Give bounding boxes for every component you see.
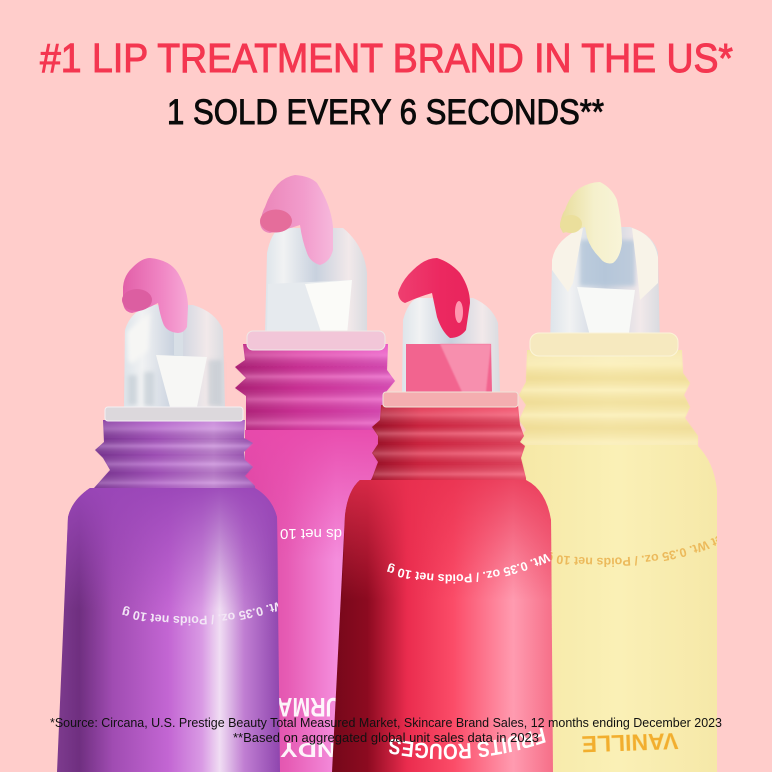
purple balm [123, 258, 188, 333]
red clear applicator [402, 298, 500, 393]
pink balm nub [260, 210, 292, 232]
red shade name: FRUITS ROUGES [389, 728, 546, 760]
yellow tube neck [519, 350, 698, 450]
pink clear applicator [265, 228, 367, 334]
red tube neck [365, 405, 526, 490]
purple applicator white reflection [127, 312, 150, 364]
yellow neck ridges [519, 350, 698, 450]
yellow applicator wedge [577, 287, 635, 347]
pink tube neck [235, 344, 395, 432]
yellow applicator left petal [552, 228, 583, 292]
tube: red [332, 246, 599, 772]
tube: hot pink (back) [235, 175, 395, 772]
red balm highlight [455, 301, 463, 323]
purple applicator stem [174, 330, 183, 356]
yellow cap ring [530, 333, 678, 356]
pink tube label [277, 525, 342, 760]
red tube body [332, 480, 553, 772]
red body top shade [342, 480, 552, 600]
red applicator balm fill [406, 344, 492, 392]
yellow applicator right petal [632, 228, 658, 300]
footnote 1: *Source: Circana, U.S. Prestige Beauty Total Measured Market, Skincare Brand Sales, 12 months ending December 2023 [50, 715, 722, 730]
pink cap ring [247, 331, 385, 350]
pink shade name line 2: NDY [279, 738, 336, 760]
red applicator highlight [440, 344, 491, 392]
pink shade name line 1: URMA [277, 692, 341, 722]
red cap ring [383, 392, 518, 407]
pink applicator wedge [305, 280, 352, 335]
yellow shade name: VANILLE [581, 728, 679, 757]
purple body top shade [64, 488, 279, 610]
yellow balm [560, 182, 622, 263]
pink neck ridges [235, 344, 395, 432]
tube: purple [57, 258, 280, 772]
red tube label [387, 551, 552, 760]
purple cap ring [105, 407, 243, 421]
purple applicator wedge [156, 355, 207, 407]
pink body top shade [245, 430, 385, 560]
tube: yellow [519, 182, 717, 772]
red balm [398, 258, 470, 338]
pink applicator insert [267, 280, 352, 335]
purple balm nub [122, 289, 152, 311]
purple applicator grey stripes [128, 360, 222, 406]
red neck ridges [370, 405, 526, 482]
pink balm [260, 175, 333, 265]
pink weight text: ds net 10 [280, 525, 342, 541]
red weight text: Net Wt. 0.35 oz. / Poids net 10 g [387, 551, 552, 584]
yellow clear applicator [550, 227, 660, 347]
yellow applicator centre shade [580, 240, 635, 286]
yellow balm nub [560, 215, 582, 233]
purple clear applicator [124, 305, 225, 408]
pink tube body [245, 430, 385, 772]
yellow weight text: Net Wt. 0.35 oz. / Poids net 10 g Net Wt. [551, 536, 717, 567]
yellow tube body [519, 445, 717, 772]
subtitle: 1 SOLD EVERY 6 SECONDS** [167, 93, 604, 132]
purple tube body [57, 488, 280, 772]
yellow tube label [551, 536, 717, 752]
purple neck ridges [92, 420, 255, 490]
footnotes [50, 715, 722, 745]
footnote 2: **Based on aggregated global unit sales data in 2023 [233, 730, 539, 745]
purple tube neck [90, 420, 255, 500]
